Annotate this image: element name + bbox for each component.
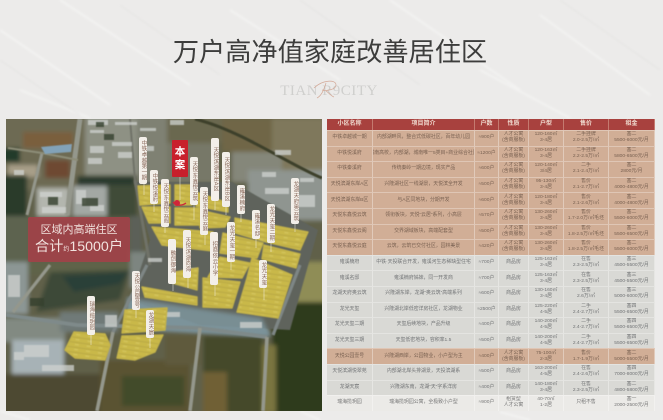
row 15: [327, 348, 655, 364]
row 18: [337, 396, 649, 408]
row 11: 商品房: [506, 291, 521, 296]
row 7: 130-260㎡: [535, 226, 557, 231]
row 6: 5500-6000元/月: [614, 216, 649, 221]
map label: 中铁卓越第一期: 中铁卓越第一期: [140, 140, 146, 181]
row 6: 售价: [581, 210, 591, 215]
row 12: 二手: [581, 304, 591, 309]
row 5: 3-4居: [540, 201, 552, 206]
row 9: 塞三: [627, 257, 636, 262]
map label: 天悦滨湖尚海: 天悦滨湖尚海: [184, 237, 190, 271]
row 12: ≈2500户: [477, 307, 496, 312]
row 4: 塞二: [627, 179, 636, 184]
row 15: 1.7-1.9万/㎡: [573, 357, 599, 362]
row 2: 二手挂牌: [576, 148, 596, 153]
row 6: ≈570户: [479, 213, 494, 218]
row 8: 售价: [581, 241, 591, 246]
map label: 天悦东鑫悦云庭: 天悦东鑫悦云庭: [201, 191, 207, 231]
row 18: 40-70㎡: [537, 397, 555, 402]
row 14: ≈500户: [479, 338, 494, 343]
row 17: ≈400户: [479, 385, 494, 390]
row 10: 2.3-2.5万/㎡: [573, 279, 599, 284]
row 8: 1.8-2.5万/㎡毛坯: [568, 247, 604, 252]
map label: 龙光天玺一期: [227, 222, 235, 262]
map label: 瑞海揽玥园: [87, 296, 95, 335]
row 11: 在售: [581, 288, 591, 293]
north-west: [0, 110, 85, 190]
row 7: 塞二: [627, 226, 636, 231]
row 1: 中铁卓越城一期: [332, 135, 367, 140]
row 13: 塞四: [627, 319, 636, 324]
row 5: (含商服板): [502, 201, 525, 206]
row 4: [327, 177, 655, 192]
row 4: 2.1-2.7万/㎡: [573, 185, 599, 190]
callout: total households: [28, 217, 130, 262]
row 3: 传统秦岭一期边境，现实产品: [392, 166, 455, 171]
row 17: 商品房: [506, 385, 521, 390]
map marker: 本案: 本: [175, 146, 185, 158]
row 14: 二手: [581, 335, 591, 340]
south-west: [0, 318, 65, 342]
row 1: ≈900户: [479, 135, 494, 140]
building textures: [8, 120, 315, 371]
callout: total households: 合计约15000户: [35, 239, 123, 255]
row 1: 5500-6000元/月: [614, 138, 649, 143]
table header: 租金: [625, 121, 638, 127]
roads: [6, 119, 322, 411]
map label: 天悦滨湖东岸B区: 天悦滨湖东岸B区: [223, 157, 229, 202]
row 6: 领衔板块，天悦“云居”系列，小高层: [385, 213, 462, 218]
row 17: 4800-5800元/月: [614, 388, 649, 393]
row 1: 塞二: [627, 132, 636, 137]
row 10: [327, 270, 654, 286]
row 2: 人才公寓: [504, 148, 523, 153]
row 15: 天悦公园壹号: [335, 354, 364, 359]
row 15: 75-100㎡: [536, 351, 556, 356]
row 3: 2800元/月: [620, 169, 643, 174]
row 6: (含商服板): [502, 216, 525, 221]
row 14: 龙光天玺三期: [335, 338, 364, 343]
map label: 龙湖天宸: 龙湖天宸: [147, 312, 153, 336]
map label: 中铁悦溪府: 中铁悦溪府: [151, 172, 157, 202]
map label: 瑞海揽玥园: 瑞海揽玥园: [88, 301, 94, 330]
row 10: 在售: [581, 273, 591, 278]
row 11: 兴隆湖东岸，龙湖“奥云筑”高端系列: [385, 291, 462, 296]
map label: 天悦滨湖东岸A区: [211, 138, 219, 201]
row 5: 售价: [581, 195, 591, 200]
table header: [327, 119, 655, 408]
row 17: 在售: [581, 382, 591, 387]
row 9: 雍溪楠府: [340, 260, 359, 265]
row 2: 2.2-2.5万/㎡: [573, 154, 599, 159]
row 15: 售价: [581, 351, 591, 356]
row 8: 3-4居: [540, 247, 552, 252]
row 15: 人才公寓: [504, 351, 523, 356]
row 12: 龙光天玺: [340, 307, 359, 312]
row 14: 4-5居: [540, 341, 552, 346]
row 6: 3-4居: [540, 216, 552, 221]
row 3: [327, 161, 655, 177]
map marker: 本案: 案: [175, 159, 185, 171]
row 1: 2.0-2.5万/㎡: [573, 138, 599, 143]
row 2: (含商服板): [502, 154, 525, 159]
row 10: 雍溪名邸: [340, 276, 359, 281]
row 6: 天悦东鑫悦云筑: [332, 213, 367, 218]
panel: satellite map: [6, 119, 322, 411]
map label: 天悦滨湖东岸A区: 天悦滨湖东岸A区: [212, 147, 218, 192]
row 11: 龙湖天府奥云筑: [332, 291, 367, 296]
row 16: 塞四: [627, 366, 636, 371]
row 5: [327, 192, 655, 208]
callout: total households: 区域内高端住区: [40, 224, 118, 236]
map label: 天悦公园壹号: [132, 271, 140, 310]
row 13: 5500-6500元/月: [614, 325, 649, 330]
row 18: 塞一: [627, 397, 636, 402]
row 9: 125-163㎡: [535, 257, 557, 262]
row 10: 125-163㎡: [535, 273, 557, 278]
row 12: 兴隆湖北岸低密洋房社区，龙湖物业: [384, 307, 463, 312]
row 7: [327, 224, 655, 239]
west middle: [0, 216, 28, 266]
row 17: 2.3-2.5万/㎡: [573, 388, 599, 393]
row 1: 120-160㎡: [535, 132, 557, 137]
row 7: 售价: [581, 226, 591, 231]
table header: 户数: [480, 121, 492, 127]
row 15: (含商服板): [502, 357, 525, 362]
row 1: (含商服板): [502, 138, 525, 143]
map label: 龙光天玺二期: [267, 204, 275, 243]
row 18: ≈900户: [479, 400, 494, 405]
row 1: 人才公寓: [504, 132, 523, 137]
row 4: (含商服板): [502, 185, 525, 190]
row 5: 人才公寓: [504, 195, 523, 200]
row 15: 兴隆湖西岸，公园物业，小户型为主: [384, 354, 463, 359]
row 4: 3-4居: [540, 185, 552, 190]
row 18: 2000-2500元/月: [614, 403, 649, 408]
table header: 户型: [540, 121, 552, 127]
row 14: 塞四: [627, 335, 636, 340]
row 8: (含商服板): [502, 247, 525, 252]
map label: 雍溪楠府: 雍溪楠府: [238, 188, 244, 211]
row 12: 4-5居: [540, 310, 552, 315]
row 9: 在售: [581, 257, 591, 262]
row 11: ≈600户: [479, 291, 494, 296]
row 13: ≈400户: [479, 322, 494, 327]
row 16: 7000-8000元/月: [614, 372, 649, 377]
row 12: [327, 302, 654, 317]
row 16: 内部湖北岸头排湖景，天投滨湖系: [387, 369, 460, 374]
row 15: 塞二: [627, 351, 636, 356]
row 5: 塞二: [627, 195, 636, 200]
row 14: 140-200㎡: [535, 335, 557, 340]
row 15: 5000-5500元/月: [614, 357, 649, 362]
row 8: 人才公寓: [504, 241, 523, 246]
row 18: 瑞海揽玥园公寓，全极致小户型: [389, 400, 458, 405]
row 9: 4500-5500元/月: [614, 263, 649, 268]
south-east: [203, 336, 263, 414]
row 10: 3-4居: [540, 279, 552, 284]
row 18: 1-2居: [540, 403, 552, 408]
row 12: 塞四: [627, 304, 636, 309]
map marker: 本案: [172, 140, 188, 177]
row 2: ≈1200户: [477, 151, 496, 156]
row 5: 120-180㎡: [535, 195, 557, 200]
row 3: 120-140㎡: [535, 163, 557, 168]
row 17: 兴隆湖东南，龙湖“天”字系洋房: [390, 385, 457, 390]
row 16: 商品房: [506, 369, 521, 374]
row 4: 售价: [581, 179, 591, 184]
row 3: 塞二: [627, 163, 636, 168]
row 6: 1.7-2.0万/㎡毛坯: [568, 216, 604, 221]
map label: 天悦东鑫悦云阁: [161, 179, 169, 227]
row 9: [327, 255, 654, 270]
row 17: 140-180㎡: [535, 382, 557, 387]
row 5: ≈600户: [479, 198, 494, 203]
row 18: 人才公寓: [504, 403, 523, 408]
row 4: 4000-4800元/月: [614, 185, 649, 190]
row 11: 130-160㎡: [535, 288, 557, 293]
row 10: 雍溪楠府姊妹，同一开发商: [394, 276, 453, 281]
row 8: 塞二: [627, 241, 636, 246]
row 12: 125-220㎡: [535, 304, 557, 309]
map label: 龙湖天宸: [146, 310, 154, 338]
row 1: 二手挂牌: [576, 132, 596, 137]
row 3: ≈600户: [479, 166, 494, 171]
title: 万户高净值家庭改善居住区: [173, 37, 487, 67]
table: residential comparison: [327, 119, 655, 408]
lake: [41, 144, 72, 154]
row 3: 二手: [581, 163, 591, 168]
map label: 天悦公园壹号: 天悦公园壹号: [133, 273, 139, 308]
row 10: 商品房: [506, 276, 521, 281]
map label: 天悦东鑫悦云阁: 天悦东鑫悦云阁: [162, 183, 168, 223]
map label: 招商依云小学: [210, 232, 218, 285]
row 5: 天悦滨湖东岸B区: [331, 198, 368, 203]
row 14: 2.4-2.7万/㎡: [573, 341, 599, 346]
map label: 天悦东鑫悦云筑: 天悦东鑫悦云筑: [191, 161, 197, 201]
row 7: 5500-6500元/月: [614, 232, 649, 237]
row 8: 云筑，云筑已交付社区，园林美景: [387, 244, 460, 249]
map label: 龙光天玺一期: 龙光天玺一期: [228, 225, 234, 259]
row 7: 1.8-2.5万/㎡毛坯: [568, 232, 604, 237]
map label: 龙光天玺: [259, 260, 267, 288]
row 1: 内部湖畔风，整合式低碳社区，百年幼儿园: [377, 135, 470, 140]
row 10: ≈700户: [479, 276, 494, 281]
row 3: 人才公寓: [504, 163, 523, 168]
row 13: [327, 317, 654, 333]
row 2: [327, 146, 655, 161]
row 14: [327, 333, 654, 348]
row 14: 天玺低密地块，容积率1.5: [396, 338, 451, 343]
map label: 龙光天玺二期: 龙光天玺二期: [268, 206, 274, 241]
map label: 龙光天玺: 龙光天玺: [260, 262, 266, 286]
row 17: 塞二: [627, 382, 636, 387]
row 7: 天悦东鑫悦云阁: [332, 229, 367, 234]
row 13: 2.4-2.7万/㎡: [573, 325, 599, 330]
row 14: 商品房: [506, 338, 521, 343]
map label: 雍溪楠府: [237, 185, 245, 214]
row 17: 3-4居: [540, 388, 552, 393]
logo: Tian R9 City: TIAN R9CITY: [280, 83, 378, 99]
map label: 天悦东鑫悦云庭: [200, 187, 208, 235]
yellow residential plots: [65, 185, 308, 360]
row 17: 龙湖天宸: [340, 385, 359, 390]
leader lines: [91, 177, 295, 348]
row 13: 二手: [581, 319, 591, 324]
map label: 融创御海: [168, 239, 176, 284]
map label: 天悦滨湖尚海: [183, 230, 191, 278]
map label: 雍溪名邸: [252, 210, 260, 239]
row 8: 5500-6000元/月: [614, 247, 649, 252]
row 4: 兴隆湖社区一线湖景，天悦滨全开发: [384, 182, 463, 187]
row 18: 瑞海揽玥园: [337, 400, 362, 405]
row 13: 商品房: [506, 322, 521, 327]
row 14: 5500-6500元/月: [614, 341, 649, 346]
yellow zone base: [130, 182, 318, 330]
row 5: 与A区同地块，分期开发: [397, 198, 450, 203]
table header: 售价: [580, 121, 592, 127]
row 2: 中铁悦溪府: [337, 151, 362, 156]
row 2: 3-4居: [540, 154, 552, 159]
map label: 龙湖天府奥云筑: 龙湖天府奥云筑: [292, 181, 298, 221]
row 8: ≈420户: [479, 244, 494, 249]
row 1: [327, 130, 655, 146]
row 6: [327, 208, 655, 224]
row 2: 5800-6500元/月: [614, 154, 649, 159]
row 8: 130-260㎡: [535, 241, 557, 246]
row 12: 商品房: [506, 307, 521, 312]
row 11: [327, 286, 654, 302]
row 17: [327, 380, 654, 395]
row 9: ≈700户: [479, 260, 494, 265]
row 7: 交界湖域板块，高端配套型: [394, 229, 453, 234]
row 7: (含商服板): [502, 232, 525, 237]
row 9: 商品房: [506, 260, 521, 265]
row 16: [327, 364, 654, 380]
row 15: ≈400户: [479, 354, 494, 359]
map label: 中铁卓越第一期: [139, 137, 147, 184]
row 16: 在售: [581, 366, 591, 371]
satellite base image: [6, 119, 322, 411]
row 7: 人才公寓: [504, 226, 523, 231]
map label: 融创御海: 融创御海: [169, 250, 175, 273]
row 15: 2-3居: [540, 357, 552, 362]
row 2: 120-163㎡: [535, 148, 557, 153]
row 13: 龙光天玺二期: [335, 322, 364, 327]
row 16: 2.4-2.6万/㎡: [573, 372, 599, 377]
map label: 龙湖天府奥云筑: [291, 178, 299, 224]
project marker: [174, 200, 180, 206]
row 11: 塞三: [627, 288, 636, 293]
row 13: 4-5居: [540, 325, 552, 330]
map label: 招商依云小学: 招商依云小学: [211, 241, 217, 276]
row 11: 5000-6000元/月: [614, 294, 649, 299]
row 10: 塞三: [627, 273, 636, 278]
row 3: 3/4居: [540, 169, 552, 174]
row 3: 中铁秦溪府: [337, 166, 362, 171]
row 11: 2.6万/㎡: [577, 294, 595, 299]
row 4: 天悦滨湖东岸A区: [331, 182, 368, 187]
row 16: 天悦滨湖悦翠苑: [332, 369, 367, 374]
row 4: 95-130㎡: [536, 179, 556, 184]
row 16: 163-200㎡: [535, 366, 557, 371]
row 16: 4-5居: [540, 372, 552, 377]
row 13: 天玺后续地块，产品升级: [397, 322, 450, 327]
table header: 项目简介: [411, 121, 436, 127]
row 18: 只租不售: [576, 400, 596, 405]
row 7: ≈500户: [479, 229, 494, 234]
row 5: 4000-4800元/月: [614, 201, 649, 206]
row 6: 130-260㎡: [535, 210, 557, 215]
map label: 雍溪名邸: 雍溪名邸: [253, 213, 259, 236]
row 9: 2.3-2.5万/㎡: [573, 263, 599, 268]
map label: 天悦东鑫悦云筑: [190, 157, 198, 205]
row 13: 140-200㎡: [535, 319, 557, 324]
row 3: (含商服板): [502, 169, 525, 174]
row 6: 人才公寓: [504, 210, 523, 215]
row 2: 塞二: [627, 148, 636, 153]
row 5: 2.1-2.6万/㎡: [573, 201, 599, 206]
row 3: 2.1-2.4万/㎡: [573, 169, 599, 174]
row 6: 塞二: [627, 210, 636, 215]
table header: 小区名称: [337, 121, 362, 127]
row 9: 中铁·天投联合开发，雍溪河生态稀缺型住宅: [376, 260, 471, 265]
row 18: 租赁型: [506, 397, 521, 402]
row 16: ≈500户: [479, 369, 494, 374]
map label: 天悦滨湖东岸B区: [222, 152, 230, 207]
row 9: 3-4居: [540, 263, 552, 268]
row 8: [327, 239, 655, 255]
row 4: 人才公寓: [504, 179, 523, 184]
row 12: 5500-6500元/月: [614, 310, 649, 315]
row 11: 3-4居: [540, 294, 552, 299]
row 8: 天悦东鑫悦云庭: [332, 244, 367, 249]
table header: 性质: [507, 121, 520, 127]
row 10: 4500-5500元/月: [614, 279, 649, 284]
row 4: ≈500户: [479, 182, 494, 187]
row 1: 3-4居: [540, 138, 552, 143]
row 12: 2.4-2.7万/㎡: [573, 310, 599, 315]
row 7: 3-4居: [540, 232, 552, 237]
map label: 中铁悦溪府: [150, 170, 158, 204]
